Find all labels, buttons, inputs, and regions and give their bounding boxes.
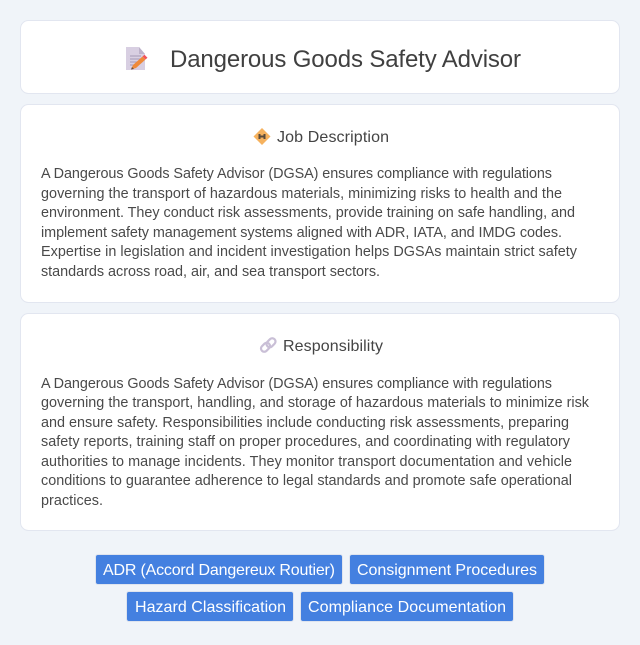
text block: responsibility <box>41 376 590 509</box>
title: Dangerous Goods Safety Advisor <box>170 46 521 73</box>
heading: responsibility: Responsibility <box>283 338 383 355</box>
tag: compliance documentation <box>300 592 514 622</box>
panel: title header <box>20 20 620 94</box>
panel: responsibility <box>20 314 620 530</box>
tag: hazard classification <box>126 592 294 622</box>
panel: job description <box>20 104 620 302</box>
icon: document with pencil <box>126 47 148 70</box>
text block: responsibility: practices. <box>41 493 103 509</box>
icon: chain link <box>260 337 277 353</box>
text block: job description: environment. They conduct risk assessments, provide training on safe handling, and <box>41 205 575 221</box>
text block: job description: implement safety management systems aligned with ADR, IATA, and IMDG codes. <box>41 225 562 241</box>
text block: job description <box>41 166 578 280</box>
tag: consignment procedures <box>350 554 544 584</box>
tag: compliance documentation: Compliance Documentation <box>308 599 506 616</box>
text block: responsibility: authorities to manage incidents. They monitor transport documentation and vehicle <box>41 454 572 470</box>
text block: responsibility: governing the transport, handling, and storage of hazardous materials to minimize risk <box>41 395 590 411</box>
tag: ADR <box>96 554 342 584</box>
tag: hazard classification: Hazard Classification <box>135 599 286 616</box>
text block: job description: standards across road, air, and sea transport sectors. <box>41 264 380 280</box>
icon: warning diamond <box>254 128 270 145</box>
text block: responsibility: A Dangerous Goods Safety Advisor (DGSA) ensures compliance with regulations <box>41 376 552 392</box>
text block: job description: Expertise in legislation and incident investigation helps DGSAs maintain strict safety <box>41 244 578 260</box>
text block: responsibility: and ensure safety. Responsibilities include conducting risk assessments, preparing <box>41 415 569 431</box>
tag: ADR: ADR (Accord Dangereux Routier) <box>103 562 335 579</box>
text block: responsibility: safety reports, training staff on proper procedures, and coordinating with regulatory <box>41 434 571 450</box>
heading: job description: Job Description <box>277 129 389 146</box>
text block: job description: governing the transport of hazardous materials, minimizing risks to health and the <box>41 186 562 202</box>
text block: responsibility: conditions to guarantee adherence to legal standards and promote safe operational <box>41 473 572 489</box>
tag: consignment procedures: Consignment Procedures <box>357 562 537 579</box>
text block: job description: A Dangerous Goods Safety Advisor (DGSA) ensures compliance with regulations <box>41 166 552 182</box>
